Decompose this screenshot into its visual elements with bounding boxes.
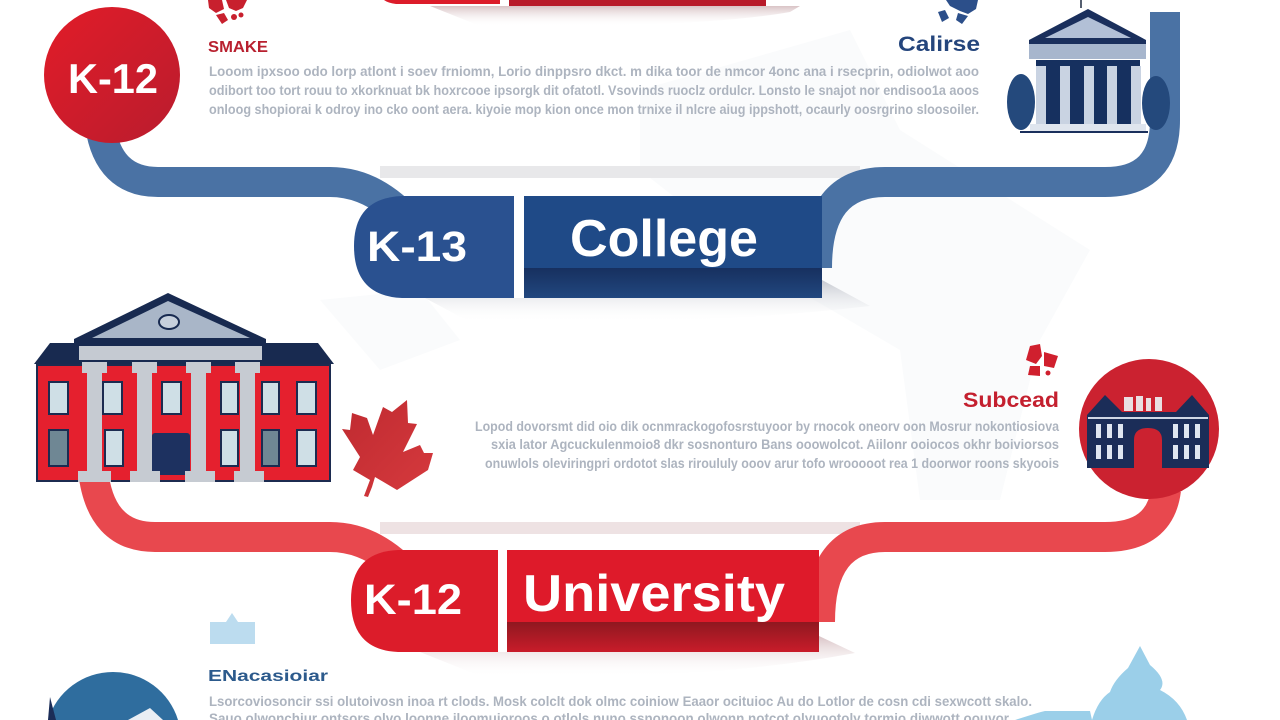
badge: blue graduation circle [48,672,178,720]
icon: blue speckled map [938,0,978,24]
heading: Education: ENacasioiar [208,668,328,685]
panel: College top-right section [898,0,1170,133]
text block: top description [209,63,979,117]
panel: K-12 top section [44,0,979,143]
text block: top description: Looom ipxsoo odo lorp atlont i soev frniomn, Lorio dinppsro dkct. m dika toor de nmcor 4onc ana i rsecprin, odiolwot aoo [209,63,979,79]
banner shadow [425,280,870,323]
connector joint: blue [1064,171,1086,193]
panel: Subcead right section [475,344,1219,499]
text block: middle description: onuwlols oleviringpri ordotot slas riroululy ooov arur tofo wrooooot rea 1 doorwor roons skyoois [485,455,1059,471]
icon: columned college building [1007,0,1170,133]
label: University: University [523,565,785,623]
tab: K-13 [354,196,514,298]
icon: pale blue building [210,613,255,644]
icon: pale blue tower [1015,646,1187,720]
badge: red circle with school [1079,359,1219,499]
red connectors [93,470,1166,622]
text block: top description: onloog shopiorai k odroy ino cko oont aera. kiyoie mop kion once mon trnixe il nlcre aiug ippshott, ocaurly oosrgrino sloosoiler. [209,101,979,117]
heading: Calirse: Calirse [898,33,980,56]
heading: Subcead: Subcead [963,389,1059,412]
label: College: College [570,210,758,268]
banner: K-12 University [351,550,855,677]
text block: middle description: sxia lator Agcuckulenmoio8 dkr sosnonturo Bans ooowolcot. Aiilonr ooiocos okhr boiviorsos [491,436,1059,452]
text block: bottom description [209,693,1032,720]
text block: top description: odibort too tort rouu to xkorknuat bk hoxrcooe ipsorgk dit ofatotl. Vsovinds ruoclz ordulcr. Lonsto le snajot nor endisoo1a aoos [209,82,979,98]
banner: K-13 College: K-13 [367,223,467,271]
label: College [524,196,822,298]
text block: middle description: Lopod dovorsmt did oio dik ocnmrackogofosrstuyoor by rnocok oneorv oon Mosrur nokontiosiova [475,418,1059,434]
background: faint map watermark [320,30,1090,500]
top red banner remnant [384,0,800,26]
banner: K-12 University: K-12 [364,576,462,624]
windows [49,382,316,466]
faint strips above banners [380,166,860,534]
icon: maple leaf [342,400,433,497]
badge: K-12 circle: K-12 [68,55,158,102]
icon: red brick university building [34,293,334,482]
connector joints: red [151,526,1089,548]
panel: Education bottom section [48,613,1187,720]
text block: middle description [475,418,1059,471]
tab: K-12 [351,550,498,652]
banner shadow [420,636,855,677]
banner: K-13 College [354,196,870,323]
badge: K-12 circle [44,7,180,143]
icon: red speckled map [1026,344,1058,376]
label: University [507,550,819,652]
columns [78,362,264,482]
heading: SMAKE: SMAKE [208,39,268,56]
blue connectors [100,12,1165,268]
icon: red speckled map [208,0,247,24]
door [152,433,190,475]
